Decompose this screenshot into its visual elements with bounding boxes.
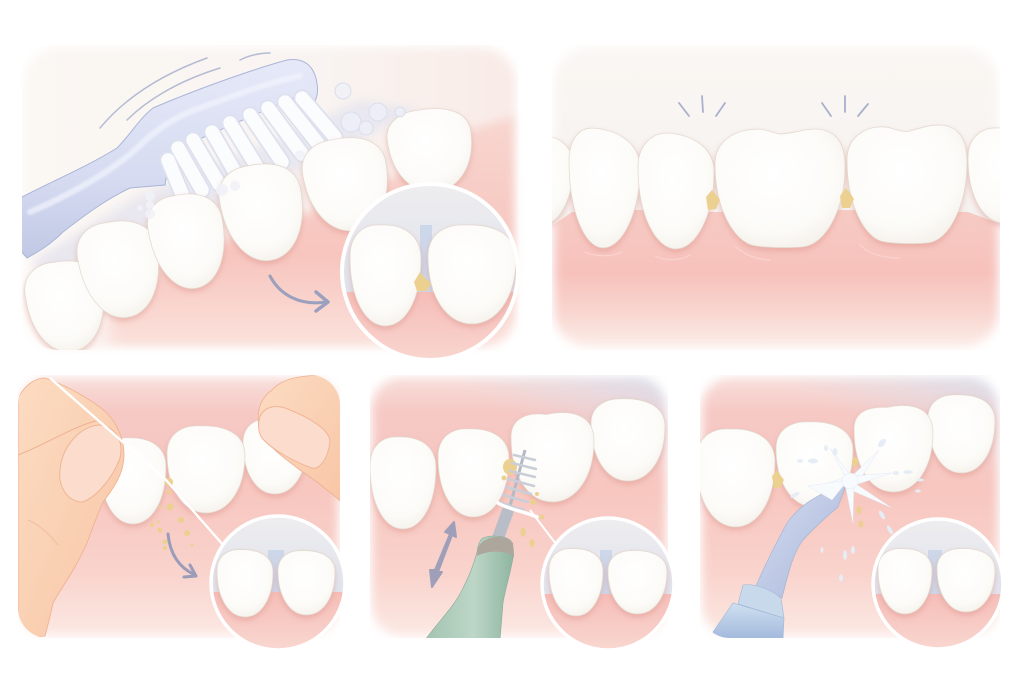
water flosser nozzle (756, 482, 847, 598)
debris (150, 478, 194, 550)
teeth (552, 124, 1000, 254)
plaque (772, 470, 784, 488)
droplets (790, 437, 924, 582)
left hand (18, 378, 124, 638)
arrow (270, 276, 328, 311)
plaque (414, 272, 431, 291)
flosser body (712, 603, 784, 640)
panel: flossing (18, 375, 348, 652)
inset circle (538, 518, 678, 652)
green handle (425, 536, 514, 640)
wire (509, 450, 525, 510)
teeth (100, 419, 307, 524)
inset circle (870, 519, 1010, 652)
panel: clean teeth with plaque (552, 50, 1000, 350)
bristles (168, 98, 335, 194)
floss (50, 378, 224, 546)
foam (137, 150, 305, 219)
arrow (430, 522, 456, 587)
inset circle (208, 516, 348, 652)
bubbles (335, 83, 405, 135)
teeth row (21, 103, 478, 357)
water spray (808, 448, 892, 524)
teeth (370, 399, 665, 529)
flosser collar (738, 585, 784, 618)
fingernail (258, 407, 330, 468)
right finger (258, 376, 345, 505)
motion lines (100, 53, 270, 128)
teeth (696, 395, 995, 527)
pointer line (530, 510, 556, 544)
bristle coil (501, 455, 536, 510)
toothbrush head and handle (20, 60, 318, 258)
sparkle lines (679, 96, 868, 116)
inset circle (340, 184, 520, 367)
panel: toothbrush brushing (20, 45, 520, 367)
panel: interdental brush (370, 375, 678, 652)
plaque and debris (502, 459, 544, 547)
plaque (706, 190, 720, 210)
gum crescents (585, 245, 900, 260)
panel: water flosser (696, 375, 1010, 652)
arrow (168, 534, 196, 577)
thumbnail (60, 425, 121, 502)
